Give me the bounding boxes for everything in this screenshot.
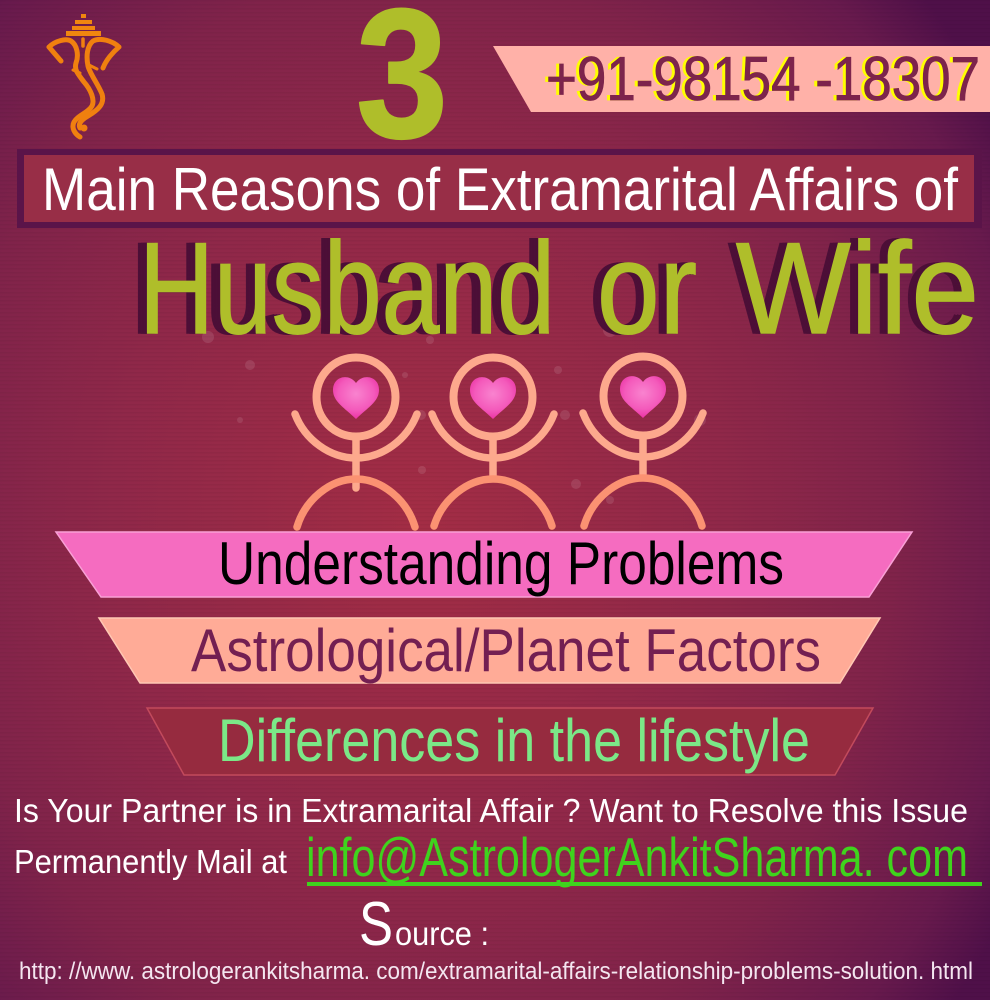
phone banner — [493, 45, 990, 114]
heart 1 — [333, 377, 379, 419]
headline: Husband or Wife: or — [595, 215, 695, 361]
source label: ource : — [395, 915, 489, 952]
heart 2 — [470, 377, 516, 419]
banner: Astrological/Planet Factors — [99, 617, 880, 684]
headline: Husband or Wife: Wife — [731, 215, 974, 361]
heart 3 — [620, 376, 666, 418]
banner: Understanding Problems — [56, 530, 912, 597]
headline: Husband or Wife: Husband — [139, 215, 555, 361]
call to action line 1: Is Your Partner is in Extramarital Affair ? Want to Resolve this Issue — [14, 792, 968, 829]
figure 2 — [432, 358, 554, 526]
headline: Husband or Wife: or — [592, 215, 692, 361]
banner 1 text: Understanding Problems — [218, 530, 784, 597]
headline: Husband or Wife: or — [589, 215, 689, 361]
banner 2 text: Astrological/Planet Factors — [191, 617, 821, 684]
banner: Differences in the lifestyle — [147, 707, 873, 775]
headline: Husband or Wife: or — [597, 215, 697, 361]
headline: Husband or Wife: Husband — [136, 215, 552, 361]
banner 3 text: Differences in the lifestyle — [218, 707, 810, 774]
headline: Husband or Wife: Wife — [736, 215, 979, 361]
logo: Ganesh icon — [49, 14, 119, 137]
figure 3 — [583, 356, 703, 526]
headline: Husband or Wife: Wife — [734, 215, 977, 361]
headline: Husband or Wife: Husband — [130, 215, 546, 361]
figure 1 — [295, 358, 417, 527]
headline: Husband or Wife: Husband — [133, 215, 549, 361]
call to action line 2: Permanently Mail at — [14, 843, 287, 880]
title banner — [17, 149, 982, 228]
headline: Husband or Wife: Wife — [728, 215, 971, 361]
headline: Husband or Wife — [130, 215, 979, 361]
source label: S — [359, 890, 393, 959]
source label — [359, 890, 489, 959]
